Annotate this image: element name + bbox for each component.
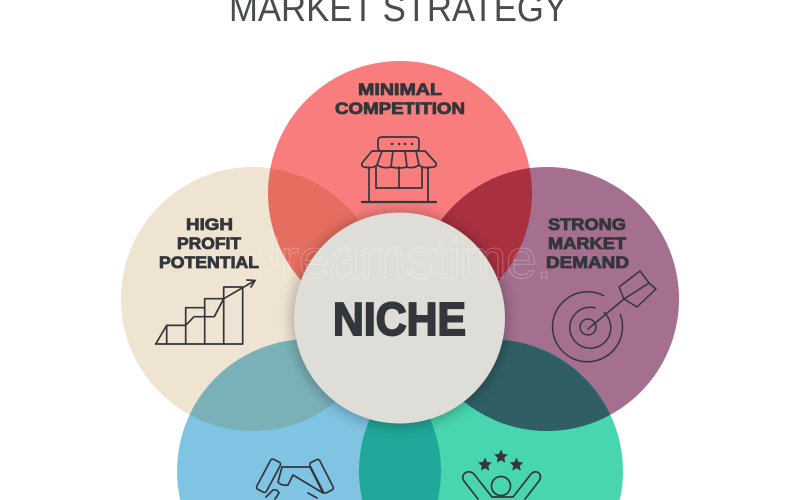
label: minimal competition: COMPETITION bbox=[335, 99, 465, 118]
center circle bbox=[294, 212, 505, 424]
label: minimal competition: MINIMAL bbox=[358, 80, 442, 99]
label: high profit potential: HIGH bbox=[186, 215, 233, 234]
overlap: bottom left and bottom right bbox=[359, 419, 441, 500]
overlap: right and bottom right bbox=[464, 340, 610, 431]
label: strong market demand bbox=[546, 215, 629, 272]
label: strong market demand: DEMAND bbox=[546, 253, 629, 272]
circle: strong market demand bbox=[415, 167, 679, 431]
icon: handshake bbox=[256, 458, 334, 499]
label: minimal competition bbox=[335, 80, 465, 118]
label: strong market demand: STRONG bbox=[548, 215, 626, 234]
icon: target with dart bbox=[541, 271, 656, 373]
center shadow bbox=[292, 212, 506, 426]
icon: rising bar chart bbox=[156, 280, 255, 344]
circle: high profit potential bbox=[121, 167, 385, 431]
watermark: dreamstime. bbox=[250, 227, 552, 290]
overlap: top and right bbox=[440, 168, 532, 281]
circle: bottom right bbox=[359, 339, 623, 500]
venn diagram bbox=[121, 61, 679, 500]
center label: niche: NICHE bbox=[333, 293, 466, 345]
label: high profit potential: PROFIT bbox=[177, 234, 242, 253]
circle: minimal competition bbox=[268, 61, 532, 325]
circle: bottom left bbox=[177, 339, 441, 500]
label: strong market demand: MARKET bbox=[548, 234, 627, 253]
label: high profit potential: POTENTIAL bbox=[159, 253, 259, 272]
icon: person with stars bbox=[463, 450, 540, 499]
overlap: left and bottom left bbox=[190, 340, 336, 431]
overlap: top and left bbox=[268, 168, 359, 280]
label: high profit potential bbox=[159, 215, 259, 272]
icon: storefront bbox=[362, 137, 436, 202]
